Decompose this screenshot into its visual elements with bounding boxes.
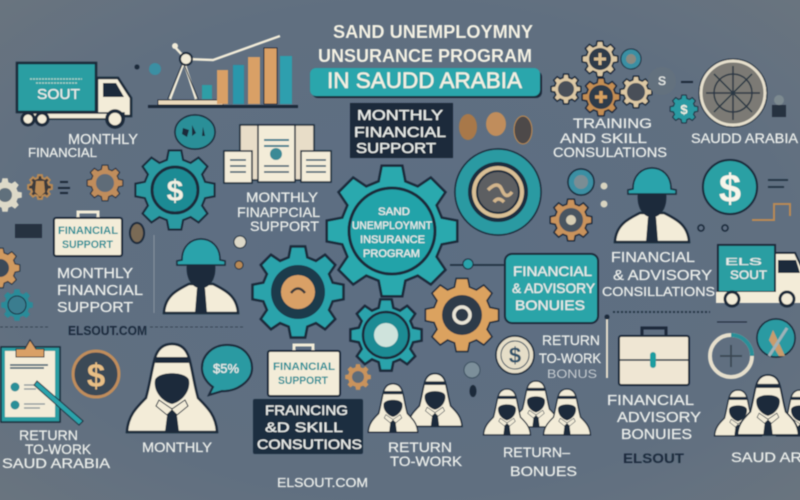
label: monthly financial support, upper middle: MONTHLY <box>246 189 319 205</box>
label: monthly financial support, upper middle: SUPPORT <box>250 218 319 234</box>
label: financial advisory bonuses: FINANCIAL <box>607 393 694 409</box>
label: return bonuses <box>503 444 577 479</box>
icon: teal pin badge <box>717 319 795 357</box>
icon: gear with orange centre <box>253 247 343 337</box>
truck: SOUT top left: SOUT <box>37 86 80 103</box>
label: return to work: TO-WORK <box>390 453 463 469</box>
connector with teal dot <box>450 259 505 269</box>
icons: small ornaments <box>0 223 246 327</box>
truck: SOUT top left <box>17 63 131 127</box>
bar chart with pump jack <box>148 36 298 108</box>
truck: SOUT right: SOUT <box>730 268 768 282</box>
icon: documents <box>224 125 331 183</box>
icon: briefcase centre right <box>619 328 689 385</box>
title <box>310 22 542 98</box>
person group: arab men right <box>715 375 800 436</box>
person group: arab men centre <box>484 381 590 435</box>
coin: dollar: $ <box>87 357 105 394</box>
icon: partial gear left edge <box>0 248 33 321</box>
label: return bonuses: RETURN– <box>503 444 570 460</box>
clipboard with pen <box>1 340 83 425</box>
label: return to work saudi arabia <box>2 428 110 471</box>
icon: circular badge <box>455 149 541 235</box>
person: hard hat worker, left <box>164 239 238 313</box>
icon: small coin <box>496 336 534 374</box>
icon: central large gear: SAND <box>378 206 410 218</box>
icon: financial support briefcase, left: FINANCIAL <box>58 225 118 237</box>
title: SAND UNEMPLOYMNY <box>333 22 533 42</box>
label: monthly financial support, upper middle: FINAPPCIAL <box>237 204 320 220</box>
speech bubble: $5% <box>213 361 239 376</box>
icon: financial support briefcase, lower: FINANCIAL <box>273 361 335 373</box>
label: return to work bonus: TO-WORK <box>539 350 602 366</box>
panel: financial and advisory bonuses: FINANCIAL <box>513 263 592 279</box>
icon: lower teal gear <box>350 299 422 371</box>
icon: financial support briefcase, left: SUPPORT <box>62 239 113 251</box>
label: monthly financial support, left <box>57 265 143 316</box>
panel: training and skill consultations: FRAINCING <box>265 402 348 418</box>
label: return to work bonus <box>539 332 602 381</box>
icon: small figure <box>772 95 786 117</box>
person: arab man, large <box>127 344 217 432</box>
icon: small orange gear lower <box>345 364 371 390</box>
panel: financial and advisory bonuses: & ADVISORY <box>512 281 595 296</box>
icon: small blue dot <box>134 63 161 75</box>
coin: dollar <box>73 351 119 397</box>
icon: financial support briefcase, lower: SUPPORT <box>278 375 328 387</box>
icon: vertical pin <box>604 312 710 378</box>
icon: dollar gear: $ <box>167 175 184 208</box>
label: return to work bonus: RETURN <box>542 332 600 348</box>
panel: training and skill consultations: &D SKILL <box>265 419 343 435</box>
person: hard hat worker, right <box>615 168 689 242</box>
icons: small gears middle right <box>550 169 608 241</box>
speech bubble <box>202 345 252 395</box>
label: ELSOUT.COM footer: ELSOUT.COM <box>277 475 368 490</box>
label: monthly, lower: MONTHLY <box>142 440 212 455</box>
label: training and skill consultations: CONSULATIONS <box>553 144 667 160</box>
label: monthly financial, left: MONTHLY <box>68 131 138 148</box>
label: training and skill consultations: TRAINING <box>573 115 652 131</box>
label: return to work <box>388 439 463 469</box>
small swirl icon <box>464 362 480 397</box>
person group: arab men left <box>368 374 462 432</box>
panel: training and skill consultations <box>253 399 363 454</box>
icon: ring gauge <box>710 335 752 377</box>
icon: dollar circle: $ <box>719 167 741 211</box>
label: monthly financial support, left: FINANCIAL <box>57 282 143 299</box>
panel: monthly financial support <box>350 103 453 158</box>
icon: central large gear: PROGRAM <box>363 248 420 260</box>
panel: monthly financial support: FINANCIAL <box>354 125 446 141</box>
icon: workers heads <box>459 112 532 144</box>
icon: small teal dollar gear: $ <box>680 102 688 117</box>
icon: compass <box>699 59 767 127</box>
title banner <box>310 68 542 98</box>
label: saudi arabia, top right: SAUDD ARABIA <box>691 131 798 146</box>
icon: dollar circle <box>703 160 757 214</box>
icon: dollar and dash <box>648 67 693 95</box>
label: training and skill consultations: AND SKILL <box>560 130 647 146</box>
label: financial advisory bonuses: ADVISORY <box>617 410 701 426</box>
label: return to work: RETURN <box>388 439 452 455</box>
icon: central large gear: INSURANCE <box>360 234 425 246</box>
title: UNSURANCE PROGRAM <box>318 46 532 66</box>
icon: dollar gear <box>135 150 215 230</box>
label: training and skill consultations <box>553 115 667 160</box>
label: monthly financial, left <box>28 131 138 160</box>
label: financial and advisory consultations: CONSILLATIONS <box>602 284 715 299</box>
icon: small teal dollar gear <box>670 95 698 123</box>
label: monthly financial support, left: MONTHLY <box>57 265 133 282</box>
label: monthly financial support, upper middle <box>237 189 320 234</box>
label: return to work saudi arabia: TO-WORK <box>25 442 91 457</box>
icon: central large gear: UNEMPLOYMNT <box>352 220 432 232</box>
panel: financial and advisory bonuses <box>505 254 598 323</box>
icon: small gears left <box>0 165 123 212</box>
title banner: IN SAUDD ARABIA <box>327 68 522 93</box>
label: monthly financial, left: FINANCIAL <box>28 146 97 160</box>
panel: financial and advisory bonuses: BONUIES <box>515 297 585 313</box>
icon: orange circuit <box>698 180 790 231</box>
label: financial and advisory consultations: FINANCIAL <box>611 249 695 266</box>
icon: financial support briefcase, left <box>54 212 122 256</box>
label: financial advisory bonuses <box>607 393 701 443</box>
label: monthly financial support, left: SUPPORT <box>57 299 133 316</box>
label: return bonuses: BONUES <box>510 463 577 479</box>
icon: financial support briefcase, lower <box>268 345 340 396</box>
panel: monthly financial support: SUPPORT <box>356 141 436 157</box>
label: return to work saudi arabia: SAUD ARABIA <box>2 456 110 471</box>
label: financial and advisory consultations: & ADVISORY <box>613 267 712 284</box>
icon: dollar and dash: S <box>658 74 666 88</box>
label: ELSOUT.COM: ELSOUT.COM <box>68 323 147 338</box>
panel: training and skill consultations: CONSUTIONS <box>257 436 362 452</box>
icon: small coin: $ <box>509 343 521 368</box>
truck: SOUT right <box>716 245 800 306</box>
label: financial and advisory consultations <box>602 249 715 299</box>
label: return to work bonus: BONUS <box>547 367 597 381</box>
icon: orange gear <box>425 278 499 352</box>
label: financial advisory bonuses: BONUIES <box>621 427 692 443</box>
label: return to work saudi arabia: RETURN <box>19 428 78 443</box>
icon: gear cluster <box>551 41 652 116</box>
panel: monthly financial support: MONTHLY <box>357 108 443 124</box>
icon: central large gear <box>327 166 457 296</box>
icon: teal oval speech <box>175 115 215 149</box>
label: ELSOUT: ELSOUT <box>623 450 684 466</box>
truck: SOUT right: ELS <box>725 257 763 268</box>
